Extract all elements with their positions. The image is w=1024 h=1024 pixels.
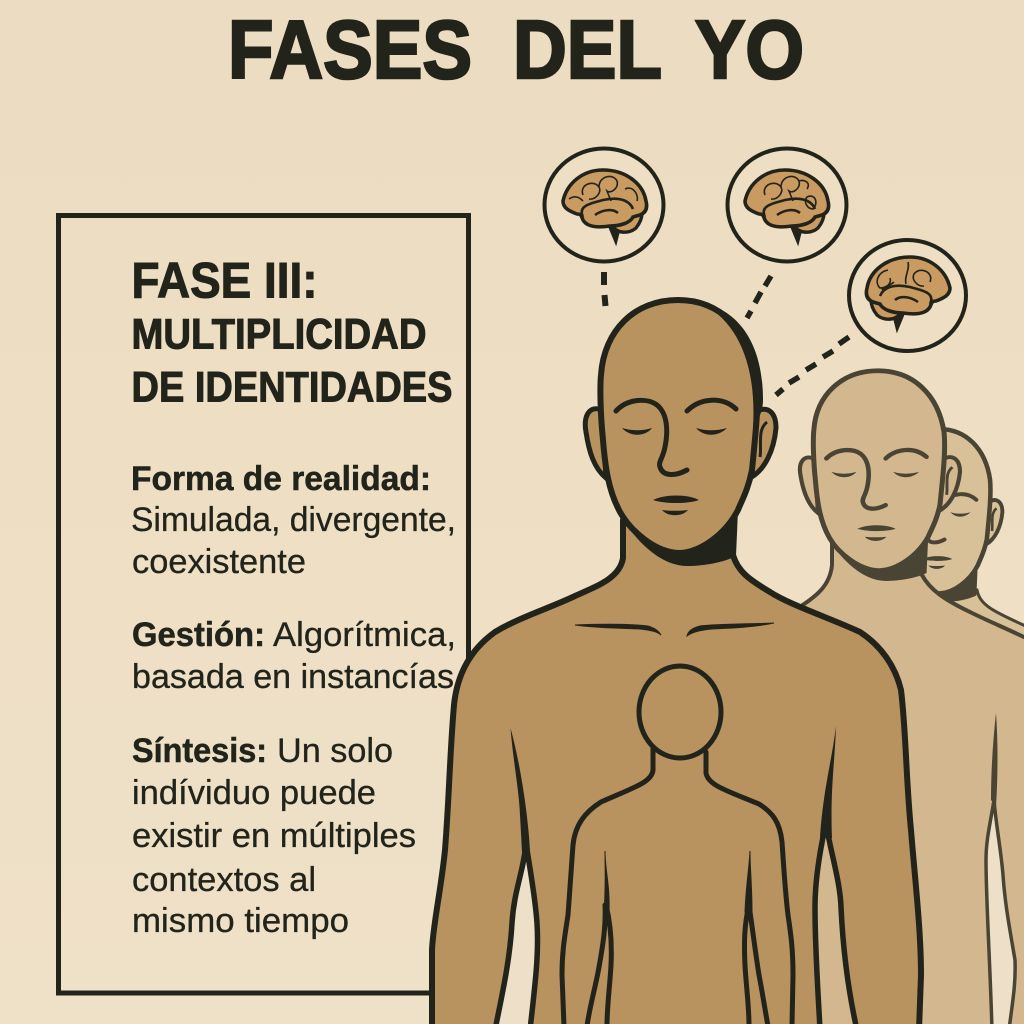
- text block: sintesis: [132, 732, 416, 940]
- panel heading: FASE III:: [132, 252, 318, 308]
- text block: sintesis: contextos al: [132, 861, 316, 899]
- title: FASES: [228, 3, 472, 96]
- text block: forma de realidad: coexistente: [132, 543, 306, 581]
- second person head: [800, 371, 960, 581]
- text block: gestion: basada en instancías: [132, 658, 454, 696]
- text block: forma de realidad: Simulada, divergente,: [131, 501, 456, 539]
- text block: gestion: Gestión:: [132, 616, 265, 654]
- dashed connector: right brain: [776, 337, 849, 395]
- title: YO: [695, 3, 804, 96]
- icon: brain left: [544, 148, 664, 262]
- dashed connector: middle brain: [747, 276, 771, 318]
- second person body: [795, 530, 1024, 1024]
- text block: sintesis: Un solo: [277, 732, 393, 770]
- text block: forma de realidad: Forma de realidad:: [131, 460, 431, 498]
- right ear: [750, 409, 776, 478]
- main body: [432, 510, 921, 1024]
- figure: main person: [432, 300, 921, 1024]
- icon: brain right: [849, 240, 966, 351]
- panel heading: [132, 252, 452, 412]
- figure: second person: [795, 371, 1024, 1024]
- left arm gap: [495, 728, 538, 1024]
- text block: gestion: Algorítmica,: [273, 616, 456, 654]
- text block: sintesis: existir en múltiples: [132, 817, 416, 855]
- dashed connector: left brain: [604, 272, 606, 306]
- text block: sintesis: mismo tiempo: [132, 902, 349, 940]
- neck shadow: [620, 510, 738, 566]
- text block: sintesis: indíviduo puede: [132, 774, 376, 812]
- text block: forma de realidad: [131, 460, 456, 581]
- icon: brain middle: [728, 148, 846, 262]
- right arm gap: [815, 726, 857, 1024]
- title: [228, 3, 804, 96]
- left ear: [585, 409, 606, 478]
- inner small figure: [562, 666, 793, 1024]
- title: DEL: [513, 3, 662, 96]
- panel: fase III: [58, 216, 468, 993]
- face: [616, 400, 736, 515]
- second person arm gap: [986, 713, 1015, 1024]
- collarbones: [575, 623, 774, 636]
- head: [600, 300, 763, 553]
- text block: sintesis: Síntesis:: [132, 732, 267, 770]
- text block: gestion: [132, 616, 456, 696]
- figure: third person: [878, 429, 1024, 660]
- panel heading: MULTIPLICIDAD: [132, 310, 426, 358]
- panel heading: DE IDENTIDADES: [132, 364, 452, 412]
